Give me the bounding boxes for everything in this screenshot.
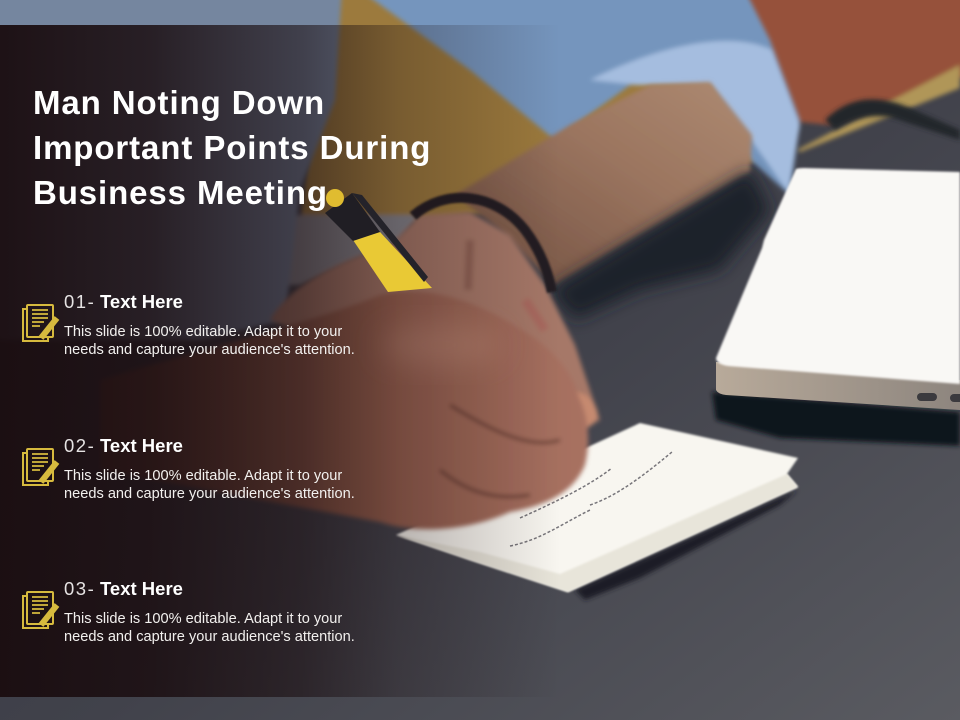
item 03 [22,578,355,645]
heading 01 [64,291,183,312]
body text 02 [64,468,355,502]
body text 03: This slide is 100% editable. Adapt it to your [64,611,342,627]
item 01 [22,291,355,358]
title [33,84,431,211]
heading 03: 03- [64,578,95,599]
heading 03 [64,578,183,599]
heading 02 [64,435,183,456]
note paper [396,423,798,592]
background wall [280,0,960,285]
laptop shadow [712,392,960,446]
back hand [270,212,600,430]
icon: notes with pencil [22,304,60,342]
bracelet [413,198,552,292]
dark overlay panel [0,25,560,697]
body text 02: This slide is 100% editable. Adapt it to your [64,468,342,484]
arm shadow on desk [550,170,770,320]
highlighter pen [325,189,432,292]
heading 02: Text Here [100,435,183,456]
title: Business Meeting [33,174,328,211]
body text 02: needs and capture your audience's attention. [64,486,355,502]
title: Important Points During [33,129,431,166]
icon: notes with pencil [22,448,60,486]
dark cable [825,99,960,140]
body text 01 [64,324,355,358]
heading 03: Text Here [100,578,183,599]
body text 01: This slide is 100% editable. Adapt it to your [64,324,342,340]
front hand [100,291,588,529]
icon: notes with pencil [22,591,60,629]
body text 01: needs and capture your audience's attention. [64,342,355,358]
paper shadow [575,490,798,600]
forearm [455,82,752,285]
body text 03 [64,611,355,645]
item 02 [22,435,355,502]
heading 01: 01- [64,291,95,312]
body text 03: needs and capture your audience's attention. [64,629,355,645]
heading 02: 02- [64,435,95,456]
shirt [0,0,800,340]
title: Man Noting Down [33,84,325,121]
heading 01: Text Here [100,291,183,312]
laptop [716,168,960,410]
hand highlight [380,323,500,367]
